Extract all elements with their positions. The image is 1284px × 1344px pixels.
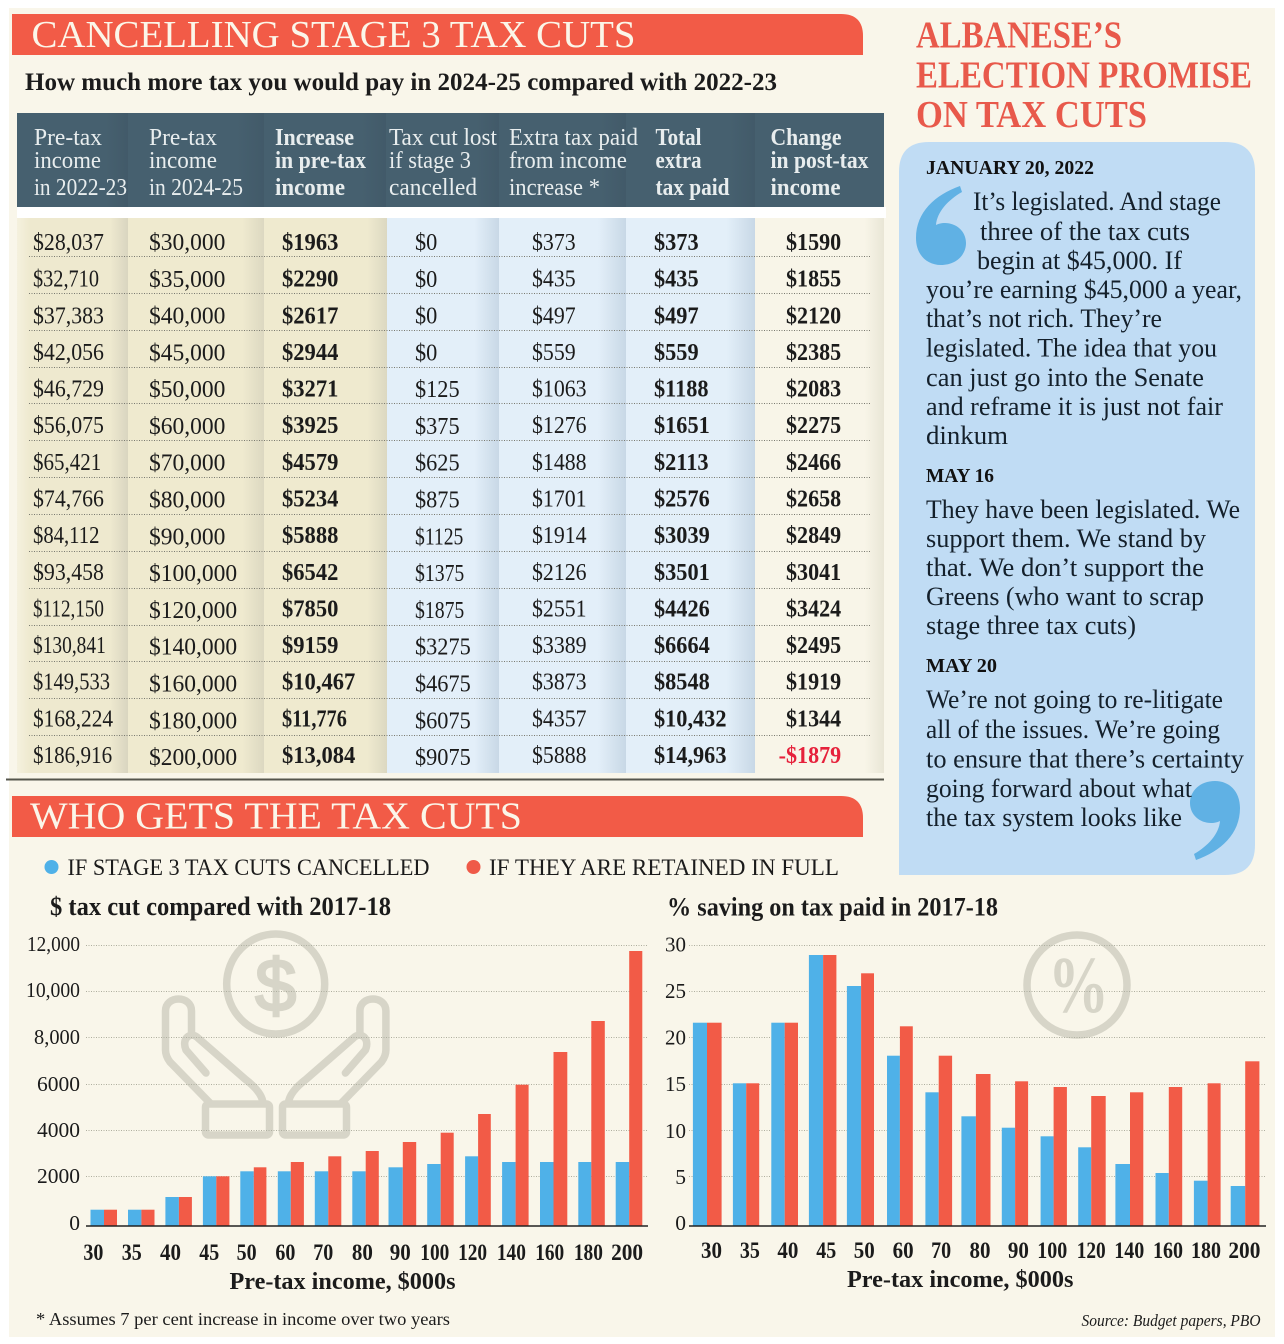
- table header: Change: [770, 125, 842, 151]
- column: pre-tax income in 2022-23: $32,710: [33, 266, 99, 292]
- y axis labels: 20: [665, 1026, 686, 1050]
- column: tax cut lost: $875: [415, 487, 460, 514]
- table header: in post-tax: [770, 148, 868, 174]
- column: change in post-tax income: $2658: [786, 485, 841, 512]
- column: increase in pre-tax income: $13,084: [282, 742, 356, 769]
- column: pre-tax income in 2022-23: $65,421: [33, 449, 101, 475]
- quote date: May 20: MAY 20: [926, 656, 997, 677]
- x axis labels: 180: [1191, 1238, 1221, 1263]
- column: pre-tax income in 2024-25: $35,000: [149, 267, 225, 293]
- column: tax cut lost: [415, 229, 471, 771]
- column: change in post-tax income: $1590: [786, 228, 841, 255]
- y axis labels: 4000: [37, 1118, 80, 1142]
- quote text: May 20: the tax system looks like: [926, 802, 1182, 832]
- column: extra tax paid from income increase: $1914: [532, 522, 587, 548]
- table header: increase *: [509, 175, 600, 201]
- column: pre-tax income in 2024-25: $120,000: [149, 598, 237, 624]
- x axis labels: 45: [816, 1238, 836, 1263]
- column: change in post-tax income: $1919: [786, 668, 841, 695]
- column: total extra tax paid: $559: [654, 339, 699, 366]
- x axis labels: 100: [420, 1240, 449, 1265]
- quote text: January 20, 2022: three of the tax cuts: [980, 216, 1190, 246]
- column: extra tax paid from income increase: $497: [532, 302, 576, 329]
- column: change in post-tax income: $2083: [786, 375, 841, 402]
- quote text: January 20, 2022: [926, 186, 1242, 450]
- x axis labels: 200: [611, 1240, 643, 1265]
- column: pre-tax income in 2022-23: $112,150: [33, 595, 104, 622]
- x axis labels: 60: [275, 1240, 295, 1265]
- column: extra tax paid from income increase: $559: [532, 339, 576, 365]
- column: tax cut lost: $6075: [415, 708, 471, 735]
- x axis labels: 40: [160, 1240, 181, 1265]
- table header: cancelled: [389, 175, 477, 201]
- panel: quotes: [899, 142, 1255, 875]
- column: extra tax paid from income increase: $1488: [532, 449, 587, 475]
- table header: income: [34, 148, 101, 174]
- x axis labels: 30: [83, 1240, 103, 1265]
- banner: cancelling stage 3 tax cuts: [12, 14, 863, 56]
- x axis labels: 80: [970, 1238, 990, 1263]
- column: pre-tax income in 2022-23: $84,112: [33, 522, 99, 548]
- icon: hands holding dollar coin: $: [255, 944, 296, 1027]
- column: total extra tax paid: $6664: [654, 632, 710, 659]
- quote text: May 16: Greens (who want to scrap: [926, 581, 1204, 611]
- table header: in 2022-23: [34, 175, 127, 201]
- table header: Increase: [275, 125, 354, 151]
- chart title: $ tax cut compared with 2017-18: [50, 892, 391, 921]
- x axis labels: 140: [1114, 1238, 1144, 1263]
- bars: if stage 3 cancelled: [90, 1156, 629, 1226]
- quote text: May 16: stage three tax cuts): [926, 610, 1136, 640]
- y axis labels: [665, 932, 686, 1235]
- table header: [17, 113, 884, 207]
- subheading: How much more tax you would pay in 2024-25 compared with 2022-23: [25, 67, 777, 96]
- column: total extra tax paid: [654, 229, 726, 769]
- x axis labels: 160: [1153, 1238, 1183, 1263]
- column: change in post-tax income: $3424: [786, 595, 842, 622]
- column: pre-tax income in 2022-23: $130,841: [33, 632, 106, 658]
- column: change in post-tax income: $3041: [786, 558, 841, 585]
- column: pre-tax income in 2022-23: $93,458: [33, 559, 104, 585]
- y axis labels: 10,000: [26, 978, 80, 1002]
- column: total extra tax paid: $497: [654, 303, 699, 330]
- column: extra tax paid from income increase: $2126: [532, 559, 587, 585]
- column: pre-tax income in 2024-25: $140,000: [149, 634, 237, 661]
- column: extra tax paid from income increase: $4357: [532, 705, 587, 732]
- column: extra tax paid from income increase: [532, 229, 587, 768]
- x axis labels: 160: [535, 1240, 564, 1265]
- column: increase in pre-tax income: $2617: [282, 303, 339, 329]
- column: increase in pre-tax income: $2944: [282, 339, 339, 366]
- column: tax cut lost: $1375: [415, 560, 464, 587]
- column: change in post-tax income: $2120: [786, 301, 841, 329]
- column: pre-tax income in 2024-25: $200,000: [149, 745, 237, 771]
- right column heading: [916, 14, 1252, 136]
- x axis labels: 30: [701, 1238, 722, 1263]
- quote text: January 20, 2022: that’s not rich. They’re: [926, 303, 1162, 333]
- column: increase in pre-tax income: $4579: [282, 449, 338, 476]
- column: pre-tax income in 2022-23: $149,533: [33, 669, 110, 695]
- column: increase in pre-tax income: [282, 229, 356, 769]
- table header: income: [275, 175, 345, 201]
- column: pre-tax income in 2024-25: $45,000: [149, 340, 225, 366]
- column: tax cut lost: $125: [415, 376, 460, 403]
- column: pre-tax income in 2022-23: $37,383: [33, 302, 104, 329]
- quote text: January 20, 2022: It’s legislated. And stage: [973, 186, 1221, 216]
- x axis labels: 120: [1077, 1238, 1106, 1263]
- column: total extra tax paid: $4426: [654, 596, 710, 623]
- quote date: May 16: MAY 16: [926, 466, 994, 487]
- banner: who gets the tax cuts: WHO GETS THE TAX CUTS: [30, 796, 522, 838]
- chart: percent saving on tax paid in 2017-18: [665, 892, 1266, 1293]
- column: pre-tax income in 2024-25: $50,000: [149, 377, 225, 403]
- column: pre-tax income in 2022-23: [33, 229, 114, 768]
- column: change in post-tax income: $2466: [786, 448, 841, 475]
- bars: if retained in full: [104, 951, 642, 1226]
- icon: closing quote mark: [1190, 781, 1240, 860]
- legend: [44, 855, 839, 880]
- column: increase in pre-tax income: $3271: [282, 376, 338, 403]
- column: tax cut lost: $3275: [415, 634, 471, 661]
- column: pre-tax income in 2024-25: $160,000: [149, 671, 237, 698]
- x axis labels: 120: [458, 1240, 487, 1265]
- column: tax cut lost: $0: [415, 266, 437, 293]
- y axis labels: 0: [675, 1211, 686, 1235]
- table body background: [17, 207, 886, 773]
- quote text: May 16: that. We don’t support the: [926, 552, 1204, 582]
- x axis title: Pre-tax income, $000s: [230, 1268, 456, 1295]
- column: tax cut lost: $0: [415, 303, 437, 330]
- quote text: January 20, 2022: and reframe it is just not fair: [926, 391, 1223, 421]
- column: total extra tax paid: $435: [654, 266, 699, 293]
- y axis labels: 30: [665, 932, 686, 956]
- column: pre-tax income in 2024-25: $180,000: [149, 708, 237, 734]
- column: extra tax paid from income increase: $373: [532, 229, 576, 255]
- legend: IF STAGE 3 TAX CUTS CANCELLED: [68, 855, 430, 880]
- x axis labels: [83, 1240, 643, 1265]
- column: increase in pre-tax income: $3925: [282, 413, 338, 439]
- quote text: May 16: They have been legislated. We: [926, 494, 1240, 524]
- column: change in post-tax income: -$1879: [779, 741, 841, 768]
- quote date: January 20, 2022: JANUARY 20, 2022: [926, 158, 1094, 179]
- column: pre-tax income in 2022-23: $56,075: [33, 412, 104, 438]
- column: extra tax paid from income increase: $3873: [532, 669, 587, 695]
- quote text: May 20: all of the issues. We’re going: [926, 714, 1220, 744]
- x axis labels: [701, 1238, 1260, 1263]
- quote text: January 20, 2022: legislated. The idea that you: [926, 332, 1217, 362]
- column: tax cut lost: $375: [415, 413, 460, 440]
- column: change in post-tax income: $2275: [786, 411, 841, 438]
- column: pre-tax income in 2022-23: $186,916: [33, 742, 112, 768]
- icon: opening quote mark: [916, 186, 966, 265]
- table header: Extra tax paid: [509, 125, 638, 151]
- table header: Pre-tax: [34, 125, 102, 151]
- x axis labels: 35: [740, 1238, 760, 1263]
- column: increase in pre-tax income: $11,776: [282, 706, 347, 732]
- column: increase in pre-tax income: $7850: [282, 596, 338, 623]
- y axis labels: 25: [665, 979, 686, 1003]
- right column heading: ALBANESE’S: [916, 14, 1122, 56]
- column: pre-tax income in 2024-25: $100,000: [149, 561, 237, 587]
- x axis labels: 50: [237, 1240, 257, 1265]
- column: total extra tax paid: $3039: [654, 522, 710, 549]
- quote text: January 20, 2022: you’re earning $45,000 a year,: [926, 274, 1242, 304]
- x axis labels: 80: [352, 1240, 373, 1265]
- column: tax cut lost: $4675: [415, 671, 471, 698]
- quote text: May 20: We’re not going to re-litigate: [926, 684, 1223, 714]
- column: pre-tax income in 2024-25: $80,000: [149, 487, 225, 514]
- table header: Pre-tax: [149, 125, 217, 151]
- legend: IF THEY ARE RETAINED IN FULL: [489, 855, 839, 880]
- column: extra tax paid from income increase: $2551: [532, 595, 587, 622]
- right column heading: ON TAX CUTS: [916, 94, 1147, 136]
- table header: in pre-tax: [275, 148, 366, 174]
- column: pre-tax income in 2022-23: $168,224: [33, 705, 114, 732]
- table header: from income: [509, 148, 627, 174]
- source: Source: Budget papers, PBO: [1082, 1311, 1260, 1330]
- column: increase in pre-tax income: $1963: [282, 229, 338, 256]
- table header: Tax cut lost: [389, 125, 497, 151]
- quote text: May 16: [926, 494, 1240, 640]
- column: total extra tax paid: $3501: [654, 559, 710, 586]
- x axis labels: 200: [1228, 1238, 1260, 1263]
- table header: extra: [656, 148, 702, 174]
- x axis labels: 180: [574, 1240, 603, 1265]
- column: total extra tax paid: $10,432: [654, 706, 726, 733]
- column: change in post-tax income: [779, 228, 842, 768]
- table: [17, 113, 886, 773]
- column: pre-tax income in 2024-25: $70,000: [149, 450, 225, 477]
- y axis labels: 6000: [37, 1072, 80, 1096]
- quote text: May 20: to ensure that there’s certainty: [926, 744, 1245, 774]
- column: total extra tax paid: $2113: [654, 449, 709, 476]
- x axis labels: 70: [313, 1240, 333, 1265]
- y axis labels: 12,000: [27, 932, 80, 956]
- column: tax cut lost: $0: [415, 340, 437, 367]
- column: extra tax paid from income increase: $1276: [532, 412, 587, 438]
- x axis labels: 60: [893, 1238, 914, 1263]
- column: extra tax paid from income increase: $1701: [532, 486, 587, 512]
- table header: Total: [656, 125, 702, 151]
- column: change in post-tax income: $2849: [786, 521, 841, 548]
- column: pre-tax income in 2024-25: $30,000: [149, 230, 225, 256]
- footnote: * Assumes 7 per cent increase in income over two years: [36, 1309, 450, 1329]
- x axis title: Pre-tax income, $000s: [847, 1266, 1074, 1293]
- x axis labels: 70: [931, 1238, 951, 1263]
- y axis labels: 15: [665, 1072, 686, 1096]
- column: total extra tax paid: $1651: [654, 412, 710, 439]
- column: pre-tax income in 2024-25: $40,000: [149, 303, 225, 330]
- column: change in post-tax income: $1344: [786, 704, 842, 732]
- icon: percent sign in circle: %: [1048, 942, 1109, 1030]
- column: tax cut lost: $1875: [415, 597, 464, 624]
- quote text: May 16: support them. We stand by: [926, 523, 1207, 553]
- quote text: May 20: going forward about what: [926, 773, 1193, 803]
- x axis labels: 90: [1008, 1238, 1029, 1263]
- x axis labels: 90: [390, 1240, 411, 1265]
- x axis labels: 50: [854, 1238, 875, 1263]
- column: pre-tax income in 2024-25: [149, 230, 237, 771]
- column: extra tax paid from income increase: $435: [532, 266, 576, 292]
- column: tax cut lost: $625: [415, 450, 460, 477]
- chart: dollar tax cut compared with 2017-18: [26, 892, 648, 1295]
- y axis labels: [26, 932, 80, 1235]
- icon: percent sign in circle: [1027, 935, 1127, 1035]
- quote text: January 20, 2022: begin at $45,000. If: [977, 245, 1182, 275]
- table header: tax paid: [656, 175, 730, 201]
- y axis labels: 8,000: [34, 1025, 80, 1049]
- column: pre-tax income in 2024-25: $90,000: [149, 524, 225, 550]
- column: increase in pre-tax income: $2290: [282, 266, 338, 293]
- column: total extra tax paid: $8548: [654, 669, 710, 696]
- banner: cancelling stage 3 tax cuts: CANCELLING STAGE 3 TAX CUTS: [32, 14, 636, 56]
- column: increase in pre-tax income: $5234: [282, 486, 339, 513]
- column: change in post-tax income: $2385: [786, 338, 841, 365]
- y axis labels: 5: [675, 1165, 686, 1189]
- table header: income: [149, 148, 217, 174]
- column: increase in pre-tax income: $6542: [282, 559, 338, 586]
- banner: who gets the tax cuts: [12, 796, 863, 838]
- column: extra tax paid from income increase: $1063: [532, 376, 587, 402]
- column: pre-tax income in 2022-23: $74,766: [33, 486, 104, 512]
- column: increase in pre-tax income: $10,467: [282, 669, 356, 696]
- column: extra tax paid from income increase: $3389: [532, 632, 587, 658]
- quote text: January 20, 2022: can just go into the Senate: [926, 362, 1204, 392]
- column: total extra tax paid: $2576: [654, 486, 710, 513]
- y axis labels: 0: [69, 1211, 80, 1235]
- column: pre-tax income in 2022-23: $42,056: [33, 339, 104, 365]
- column: increase in pre-tax income: $5888: [282, 522, 338, 549]
- x axis labels: 140: [497, 1240, 526, 1265]
- table header: if stage 3: [389, 148, 471, 174]
- column: total extra tax paid: $373: [654, 229, 699, 256]
- chart title: % saving on tax paid in 2017-18: [667, 892, 998, 922]
- table header: in 2024-25: [149, 175, 243, 201]
- x axis labels: 100: [1037, 1238, 1067, 1263]
- column: tax cut lost: $0: [415, 229, 437, 256]
- column: tax cut lost: $9075: [415, 744, 471, 771]
- column: total extra tax paid: $14,963: [654, 742, 726, 769]
- x axis labels: 45: [199, 1240, 219, 1265]
- quote text: January 20, 2022: dinkum: [926, 420, 1008, 450]
- icon: hands holding dollar coin: [166, 934, 386, 1135]
- column: pre-tax income in 2022-23: $46,729: [33, 376, 104, 402]
- x axis labels: 40: [777, 1238, 798, 1263]
- table header: income: [770, 175, 841, 201]
- y axis labels: 10: [665, 1119, 686, 1143]
- column: increase in pre-tax income: $9159: [282, 632, 338, 659]
- column: extra tax paid from income increase: $5888: [532, 742, 587, 768]
- quote text: May 20: [926, 684, 1245, 832]
- column: tax cut lost: $1125: [415, 524, 463, 551]
- bars: if retained in full: [707, 955, 1259, 1226]
- column: pre-tax income in 2022-23: $28,037: [33, 229, 104, 255]
- x axis labels: 35: [122, 1240, 142, 1265]
- y axis labels: 2000: [37, 1164, 80, 1188]
- bars: if stage 3 cancelled: [693, 955, 1245, 1226]
- column: change in post-tax income: $1855: [786, 265, 841, 292]
- column: pre-tax income in 2024-25: $60,000: [149, 414, 225, 440]
- column: total extra tax paid: $1188: [654, 376, 709, 403]
- column: change in post-tax income: $2495: [786, 631, 841, 658]
